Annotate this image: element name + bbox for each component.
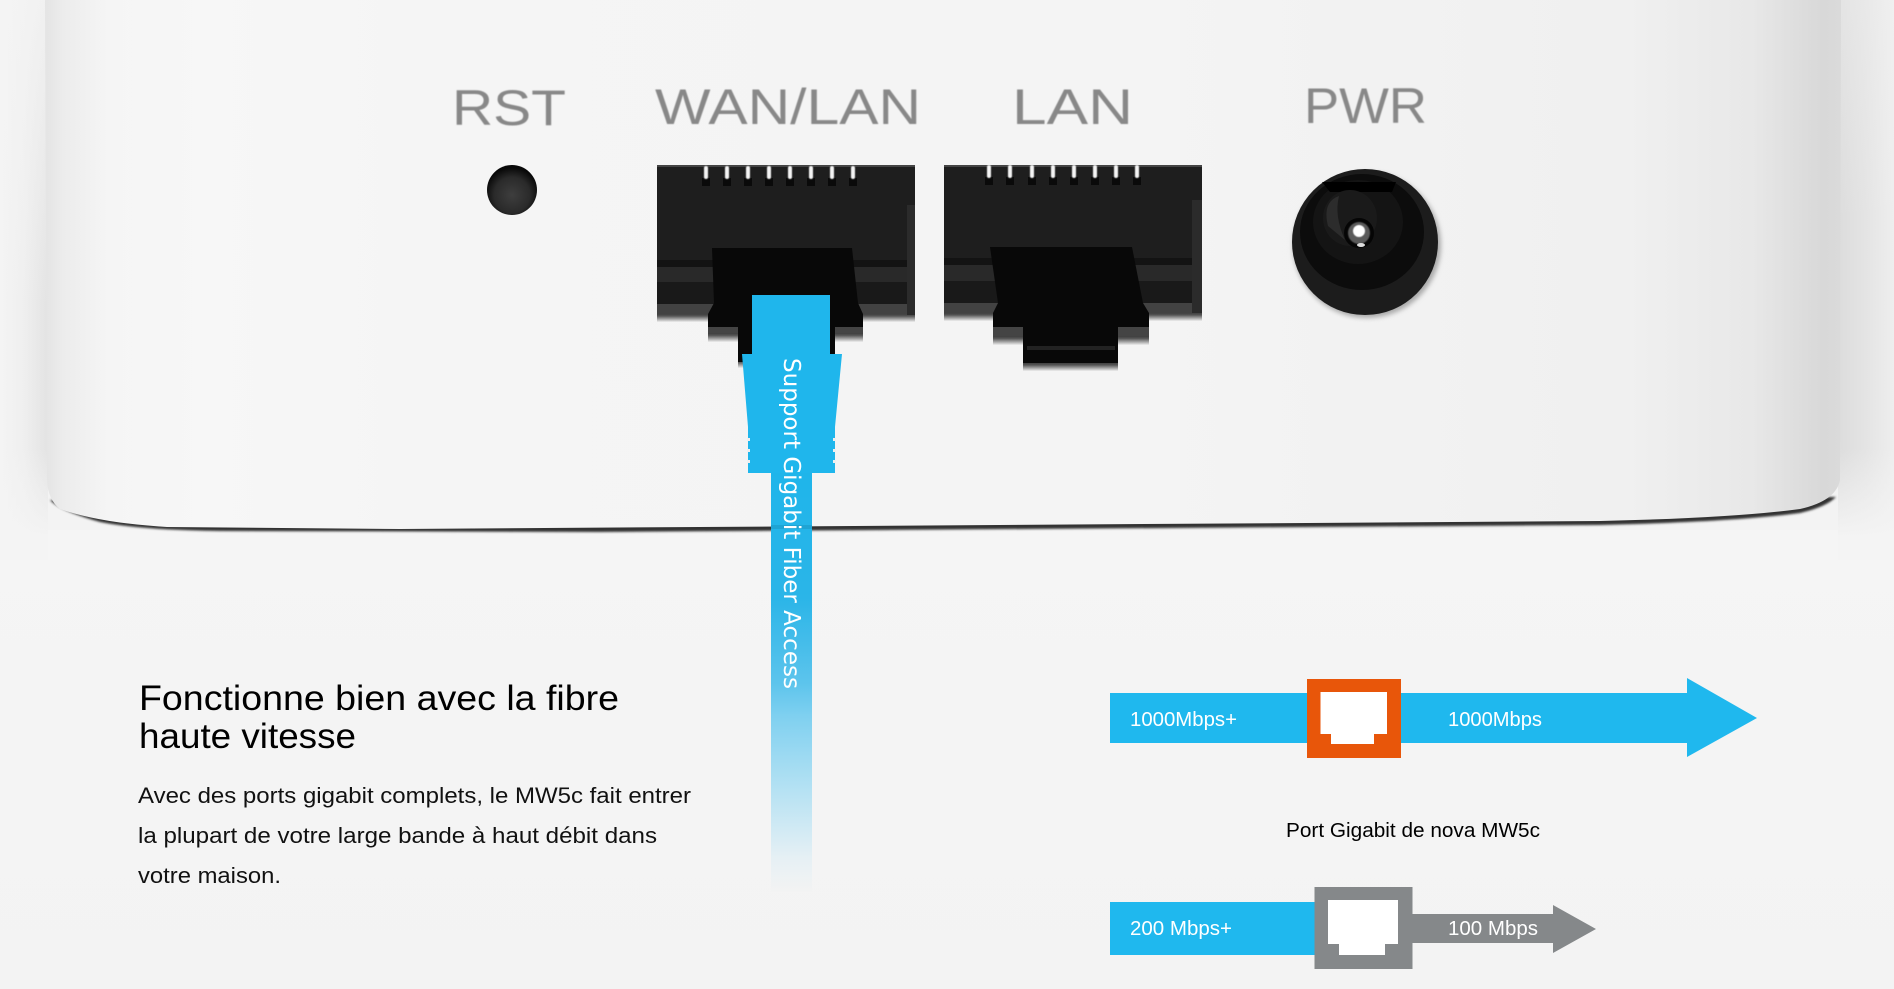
heading: [139, 679, 619, 756]
label: 1000Mbps+: 1000Mbps+: [1130, 709, 1237, 731]
body text: la plupart de votre large bande à haut débit dans: [138, 823, 657, 848]
blue fiber cable: [742, 295, 842, 892]
icon: LAN ethernet port: [944, 165, 1202, 371]
port label: PWR: PWR: [1304, 78, 1427, 134]
port label: RST: RST: [452, 80, 566, 136]
body text: [138, 783, 691, 888]
icon: reset button: [487, 165, 537, 215]
port label: WAN/LAN: WAN/LAN: [655, 79, 921, 135]
icon: orange port: [1307, 679, 1401, 758]
label: 200 Mbps+: 200 Mbps+: [1130, 918, 1232, 940]
label: 1000Mbps: 1000Mbps: [1448, 709, 1542, 731]
heading: haute vitesse: [139, 717, 356, 756]
body text: votre maison.: [138, 863, 281, 888]
icon: power jack: [1292, 169, 1441, 318]
label: 100 Mbps: 100 Mbps: [1448, 918, 1538, 940]
body text: Avec des ports gigabit complets, le MW5c fait entrer: [138, 783, 691, 808]
router body: [45, 0, 1841, 532]
icon: WAN/LAN ethernet port: [657, 165, 915, 368]
cable text: Support Gigabit Fiber Access: [778, 358, 804, 689]
caption: Port Gigabit de nova MW5c: [1286, 820, 1540, 842]
diagram: 100 Mbps port arrow: [1110, 887, 1596, 969]
heading: Fonctionne bien avec la fibre: [139, 679, 619, 718]
port label: LAN: LAN: [1012, 79, 1133, 135]
diagram: gigabit port arrow: [1110, 678, 1757, 758]
icon: grey port: [1314, 887, 1412, 969]
